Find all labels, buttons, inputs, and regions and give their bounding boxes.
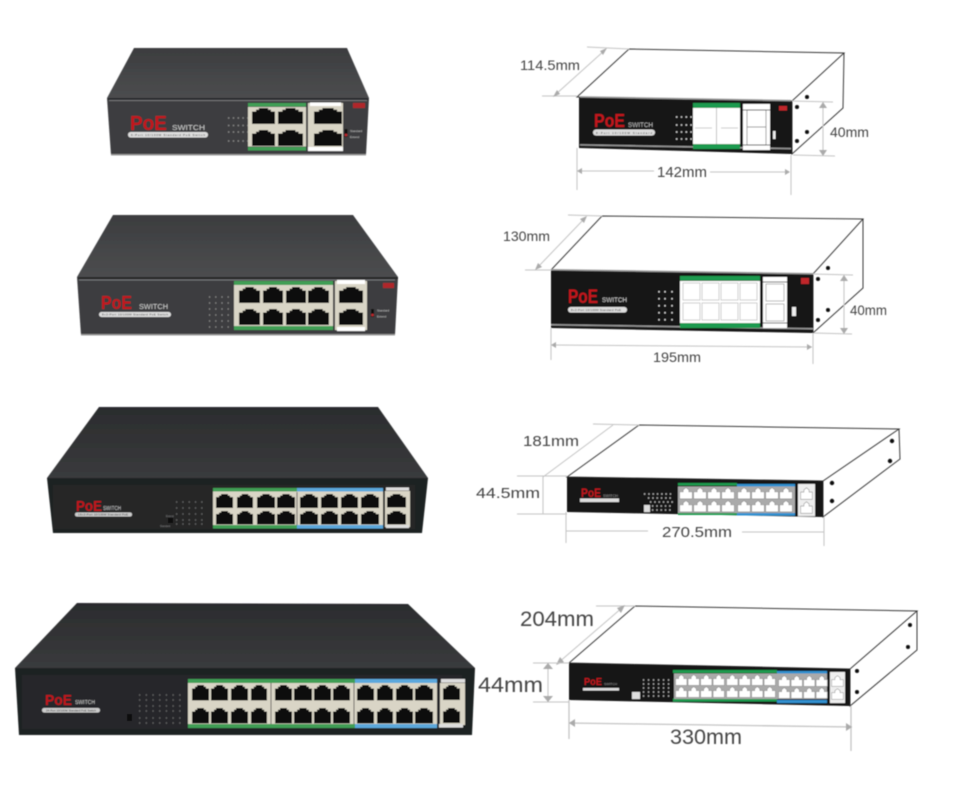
uplink block [743,104,770,150]
green strips [680,276,760,328]
height dimension [517,476,567,514]
SWITCH wordmark: SWITCH [75,700,95,706]
green port strips [188,679,355,728]
depth dimension [556,605,635,665]
uplink ports [308,102,343,151]
switch top cover [107,48,369,98]
blue strips [737,484,795,516]
switch top cover [77,215,398,277]
mode switch [632,692,640,699]
front panel [551,270,813,333]
label 195mm: 195mm [653,349,701,365]
depth dimension [525,215,602,270]
red badge [383,283,394,288]
status LEDs [659,291,672,322]
switch top cover [47,407,428,478]
switch top cover [15,603,475,668]
label 44.5mm: 44.5mm [476,485,540,502]
panel: 18-port switch photo [47,407,428,533]
PoE logo: PoE [76,498,102,515]
outline box [569,606,917,706]
PoE ports [248,107,306,146]
model label pill [128,132,208,138]
model label pill: 6-Port 10/100M Standard PoE Switch [131,133,205,137]
width dimension [569,700,852,751]
label 40mm: 40mm [830,124,869,140]
PoE ports [234,285,333,326]
model label pill: 16+2-Port 10/100M Standard PoE [78,513,128,517]
model label pill [583,688,619,690]
blue port strips [355,679,437,728]
panel: 10-port dimension drawing [503,215,887,365]
mode switch: Extend [377,314,387,318]
SWITCH wordmark: SWITCH [602,298,627,304]
SWITCH wordmark: SWITCH [103,506,121,512]
PoE ports [188,683,437,724]
green strips [673,670,777,702]
label 142mm: 142mm [657,165,707,181]
SWITCH wordmark: SWITCH [604,682,617,686]
label 181mm: 181mm [523,433,579,450]
PoE logo: PoE [101,293,132,313]
SWITCH wordmark: SWITCH [603,494,619,498]
model label pill [580,498,619,502]
panel: 8-port dimension drawing [520,47,869,195]
switch front face [47,478,428,533]
PoE logo: PoE [581,488,601,500]
uplink block [830,672,845,703]
mode switch: Standard [350,129,363,133]
red badge [779,106,787,110]
green port strips [213,488,297,528]
model label pill [568,307,627,312]
power switch: Standard [160,525,171,528]
status LEDs [676,117,692,139]
side mounting holes [830,439,894,503]
side mounting holes [816,266,830,322]
panel: 26-port dimension drawing [478,605,917,751]
green strips [693,103,740,149]
uplink ports [385,488,410,528]
front panel [579,97,792,154]
label 40mm: 40mm [850,302,887,318]
port outlines [674,674,827,699]
blue strips [777,671,827,703]
status LEDs [228,118,248,141]
status LEDs [644,494,673,510]
depth dimension [542,47,629,97]
port outlines [680,281,760,323]
panel: 18-port dimension drawing [476,424,900,546]
mode switch [371,308,390,318]
status LEDs [139,695,183,723]
PoE logo: PoE [130,113,167,135]
port outlines [678,486,795,513]
power switch [160,515,174,528]
mode switch: Standard [377,308,390,312]
green port strips [248,103,306,150]
width dimension [577,148,791,195]
SWITCH wordmark: SWITCH [628,123,653,129]
mode switch [773,131,776,139]
status LEDs [176,502,207,524]
PoE logo: PoE [568,287,598,308]
side mounting holes [855,623,912,694]
height dimension [792,101,835,156]
PoE logo: PoE [594,111,625,131]
red badge [353,103,365,108]
green port strips [234,281,333,330]
switch front face [77,277,398,335]
side mounting holes [795,95,809,143]
depth dimension [543,424,639,477]
PoE logo: PoE [584,676,602,688]
model label pill [593,130,655,136]
switch front face [107,98,369,155]
PoE logo: PoE [45,692,72,709]
uplink ports [335,280,367,331]
mode switch [344,129,363,139]
mode switch [644,505,650,512]
SWITCH wordmark: SWITCH [172,123,205,132]
label 330mm: 330mm [670,726,742,749]
blue port strips [297,488,383,528]
uplink block [798,484,815,516]
blank port block [693,108,740,144]
PoE ports [213,492,383,525]
status LEDs [643,680,672,696]
height dimension [813,274,853,334]
outline box [551,216,863,333]
status LEDs [209,297,230,327]
uplink block [763,277,787,328]
model label pill: 8+2-Port 10/100M Standard PoE Switch [102,313,168,317]
label 114.5mm: 114.5mm [520,57,580,73]
front panel [569,663,850,706]
panel: 8-port switch photo [107,48,369,156]
power switch [127,714,132,721]
outline box [577,49,844,154]
width dimension [566,512,824,546]
panel: 10-port switch photo [77,215,398,336]
front panel [567,477,823,517]
uplink ports [439,679,465,728]
panel: 26-port switch photo [15,603,475,735]
SWITCH wordmark: SWITCH [139,304,168,311]
label 270.5mm: 270.5mm [662,524,732,541]
switch front face [15,668,475,735]
model label pill: 24-Port 10/100M Standard PoE Switch [46,708,96,712]
label 204mm: 204mm [520,608,594,631]
red badge [801,278,809,284]
label 130mm: 130mm [503,228,550,244]
power switch: Extend [166,515,174,518]
width dimension [551,328,813,364]
mode switch [792,307,796,316]
outline box [567,425,900,517]
label 44mm: 44mm [478,674,543,697]
model label pill: 8-Port 10/100M Standard [596,131,652,135]
height dimension [533,663,569,702]
model label pill: 8+2-Port 10/100M Standard PoE [571,308,621,312]
mode switch: Extend [350,135,360,139]
green strips [678,483,737,515]
